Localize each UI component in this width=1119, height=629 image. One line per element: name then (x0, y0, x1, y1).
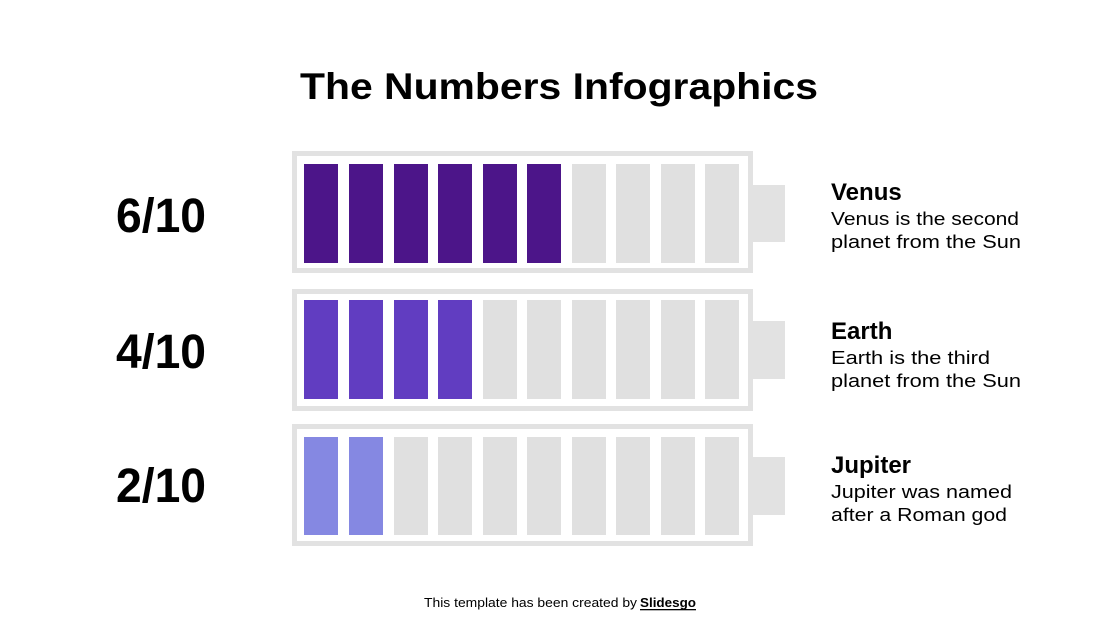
text: Venus: Venus (831, 179, 902, 206)
text: Earth: Earth is the third (831, 348, 990, 368)
battery: Jupiter 2/10 (294, 426, 785, 544)
text: Venus: planet from the Sun (831, 232, 1021, 252)
text: Jupiter: Jupiter (831, 452, 911, 479)
number: 2/10: 2/10 (116, 460, 206, 513)
footer credit: Slidesgo (640, 595, 696, 610)
text: Earth: Earth (831, 318, 892, 345)
text: Venus: Venus is the second (831, 209, 1019, 229)
text: Jupiter: Jupiter was named (831, 482, 1012, 502)
footer credit: This template has been created by (424, 595, 638, 610)
battery: Earth 4/10 (294, 292, 785, 408)
text: Jupiter: after a Roman god (831, 505, 1007, 525)
text: Earth (831, 318, 1021, 391)
number: 4/10: 4/10 (116, 326, 206, 379)
number: 6/10: 6/10 (116, 190, 206, 243)
text: Jupiter (831, 452, 1012, 525)
text: Venus (831, 179, 1021, 252)
text: Earth: planet from the Sun (831, 371, 1021, 391)
title: The Numbers Infographics (300, 66, 818, 107)
battery: Venus 6/10 (294, 154, 785, 270)
